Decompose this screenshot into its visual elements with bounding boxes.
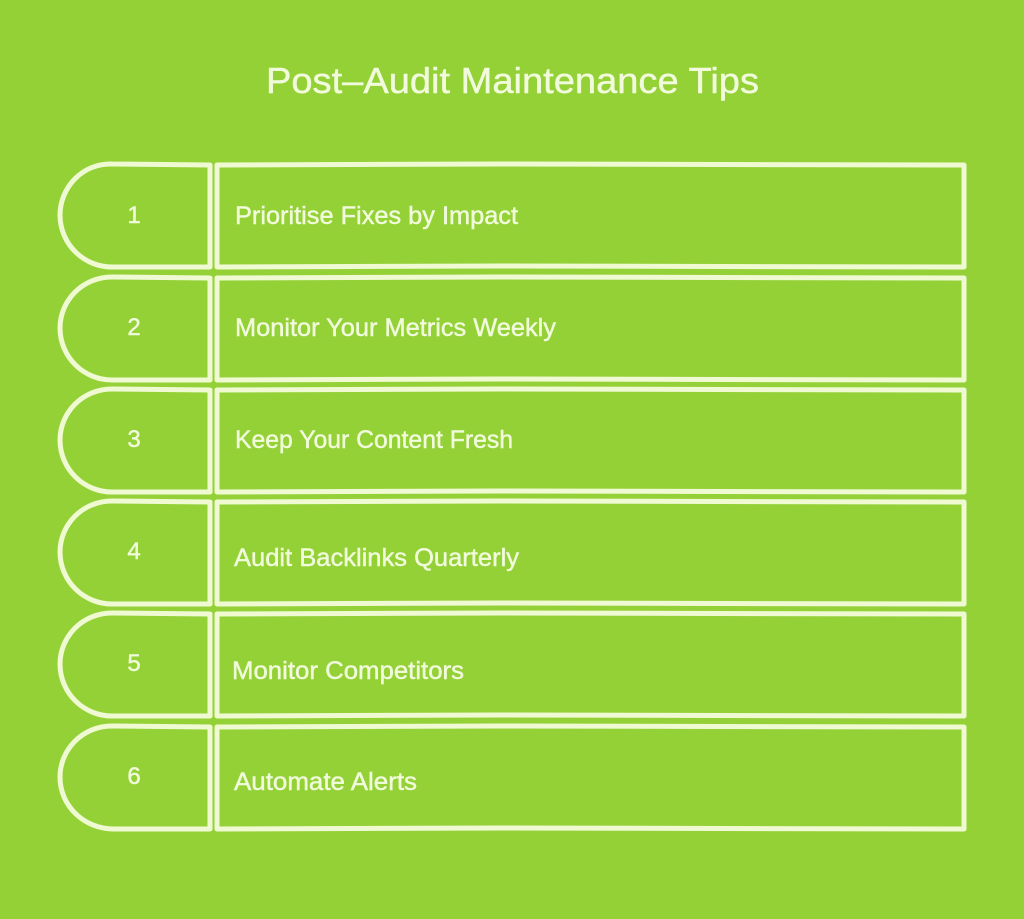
- number 1: 1: [127, 202, 141, 229]
- number tab 1: [60, 164, 210, 267]
- number 4: 4: [127, 538, 141, 565]
- title: Post–Audit Maintenance Tips: [266, 60, 759, 101]
- row 6: Automate Alerts: [60, 726, 964, 829]
- number tab 3: [60, 389, 210, 492]
- label 2: Monitor Your Metrics Weekly: [235, 314, 556, 342]
- row 3: Keep Your Content Fresh: [60, 389, 964, 492]
- label 6: Automate Alerts: [234, 768, 417, 796]
- text box 1: [217, 164, 964, 267]
- row 1: Prioritise Fixes by Impact: [60, 164, 964, 267]
- row 4: Audit Backlinks Quarterly: [60, 501, 964, 604]
- label 5: Monitor Competitors: [232, 657, 464, 685]
- number 3: 3: [127, 426, 141, 453]
- number tab 5: [60, 613, 210, 716]
- number 2: 2: [127, 314, 141, 341]
- label 3: Keep Your Content Fresh: [235, 426, 513, 454]
- label 4: Audit Backlinks Quarterly: [234, 544, 520, 572]
- text box 3: [217, 389, 964, 492]
- row 5: Monitor Competitors: [60, 613, 964, 716]
- text box 6: [217, 726, 964, 829]
- number 5: 5: [127, 650, 141, 677]
- number 6: 6: [127, 763, 141, 790]
- number tab 4: [60, 501, 210, 604]
- text box 2: [217, 277, 964, 380]
- number tab 6: [60, 726, 210, 829]
- text box 4: [217, 501, 964, 604]
- label 1: Prioritise Fixes by Impact: [235, 202, 518, 230]
- number tab 2: [60, 277, 210, 380]
- row 2: Monitor Your Metrics Weekly: [60, 277, 964, 380]
- text box 5: [217, 613, 964, 716]
